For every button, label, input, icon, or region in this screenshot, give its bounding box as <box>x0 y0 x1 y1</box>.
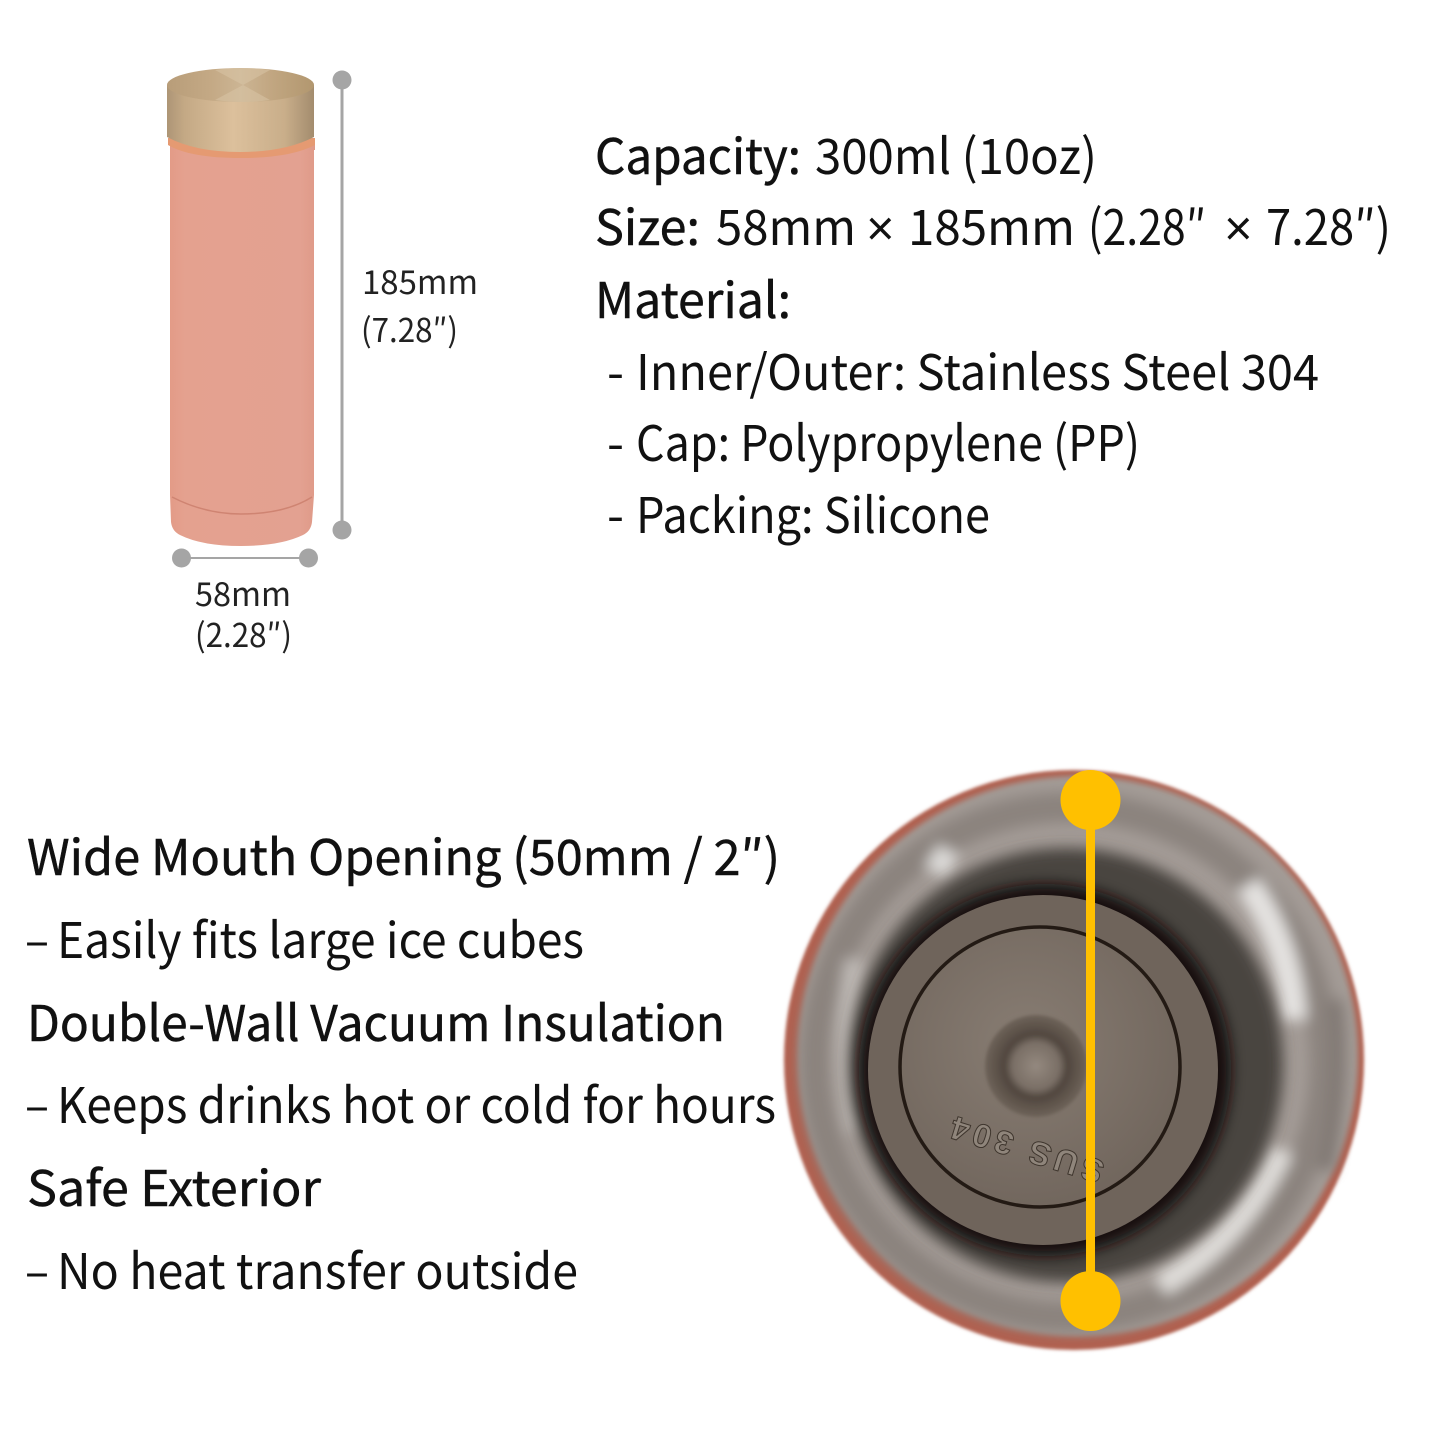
feature detail: ice cubes: – <box>25 902 49 973</box>
packing: Packing: Silicone <box>636 477 990 548</box>
packing: - <box>607 477 624 548</box>
rim <box>784 770 1364 1350</box>
centre dimple <box>985 1015 1087 1117</box>
feature heading: vacuum: Double-Wall Vacuum Insulation <box>27 985 725 1056</box>
capacity: Capacity: <box>595 118 801 189</box>
size <box>595 189 1391 260</box>
width label: (2.28″) <box>195 609 292 657</box>
feature detail: heat transfer: No heat transfer outside <box>57 1233 578 1304</box>
size: 58mm <box>716 189 856 260</box>
size: (2.28″ <box>1088 189 1206 260</box>
bottle orange ring <box>168 138 315 158</box>
inner outer: - <box>607 334 624 405</box>
capacity: 300ml (10oz) <box>815 118 1097 189</box>
illustration: bottle with dimensions <box>167 68 478 657</box>
bottle base seam <box>172 497 312 514</box>
inner outer: Inner/Outer: Stainless Steel 304 <box>636 334 1319 405</box>
inner ring <box>900 927 1180 1207</box>
size: Size: <box>595 189 700 260</box>
size: 7.28″) <box>1266 189 1391 260</box>
width dimension line <box>172 548 318 568</box>
features text block <box>25 819 780 1304</box>
bottle cap top <box>167 68 314 102</box>
feature heading: exterior: Safe Exterior <box>27 1150 322 1221</box>
bottom disc <box>868 895 1218 1245</box>
material: Material: <box>595 262 791 333</box>
capacity <box>595 118 1097 189</box>
inner wall highlights <box>815 807 1338 1317</box>
feature detail: hot or cold: – <box>25 1067 49 1138</box>
feature detail: hot or cold: Keeps drinks hot or cold for hours <box>57 1067 776 1138</box>
feature detail: heat transfer: – <box>25 1233 49 1304</box>
yellow diameter marker <box>1060 770 1120 1331</box>
bottle cap <box>167 85 314 152</box>
width label <box>195 568 292 657</box>
feature heading: wide mouth: Wide Mouth Opening (50mm / 2″) <box>27 819 780 890</box>
height label <box>361 256 478 352</box>
inner cavity <box>849 848 1283 1282</box>
embossed label: SUS 304 <box>946 1109 1108 1191</box>
cap: Cap: Polypropylene (PP) <box>636 405 1140 476</box>
height label: 185mm <box>362 256 478 304</box>
width label: 58mm <box>195 568 291 616</box>
size: × <box>1224 202 1253 256</box>
photo: top view of bottle mouth <box>784 770 1364 1350</box>
size: × <box>866 202 895 256</box>
height label: (7.28″) <box>361 304 458 352</box>
cap: - <box>607 405 624 476</box>
size: 185mm <box>908 189 1075 260</box>
height dimension line <box>332 70 352 540</box>
bottle body <box>170 140 315 546</box>
specification text block <box>595 118 1391 548</box>
feature detail: ice cubes: Easily fits large ice cubes <box>57 902 584 973</box>
